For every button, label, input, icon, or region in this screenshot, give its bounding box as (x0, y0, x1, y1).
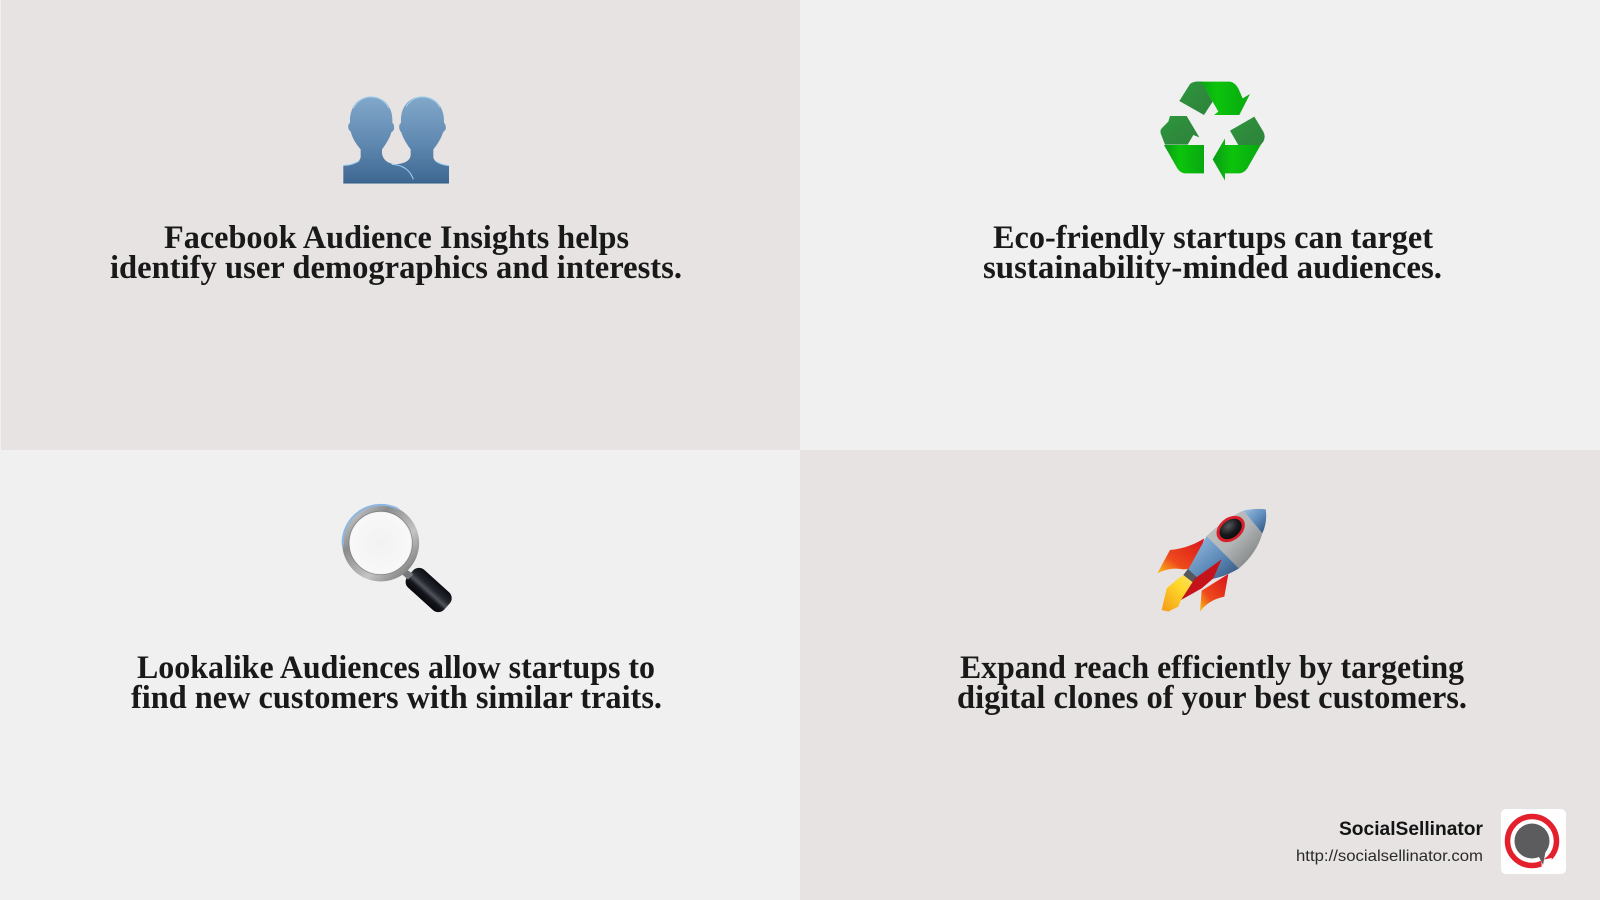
heading: bottom-left statement (131, 650, 662, 716)
panel: bottom-right background (800, 450, 1600, 900)
heading: top-left statement (110, 220, 682, 286)
icon: magnifying glass (343, 505, 455, 615)
brand url: http://socialsellinator.com (1296, 848, 1483, 865)
icon: rocket (1157, 509, 1266, 612)
heading: bottom-right statement (957, 650, 1467, 716)
icon: two silhouettes (343, 97, 449, 183)
heading: bottom-right statement: digital clones of your best customers. (957, 680, 1467, 716)
heading: top-right statement: sustainability-minded audiences. (983, 250, 1442, 286)
panel: bottom-left background (0, 450, 800, 900)
heading: top-left statement: identify user demographics and interests. (110, 250, 682, 286)
heading: bottom-right statement: Expand reach efficiently by targeting (960, 650, 1464, 686)
heading: top-right statement (983, 220, 1442, 286)
icon: recycling symbol (1160, 82, 1265, 181)
heading: bottom-left statement: Lookalike Audiences allow startups to (137, 650, 655, 686)
panel: top-right background (800, 0, 1600, 450)
heading: bottom-left statement: find new customers with similar traits. (131, 680, 662, 716)
heading: top-left statement: Facebook Audience Insights helps (164, 220, 629, 256)
logo (1501, 809, 1566, 874)
panel: top-left background (1, 0, 800, 450)
heading: top-right statement: Eco-friendly startups can target (993, 220, 1433, 256)
brand name: SocialSellinator (1339, 819, 1484, 840)
